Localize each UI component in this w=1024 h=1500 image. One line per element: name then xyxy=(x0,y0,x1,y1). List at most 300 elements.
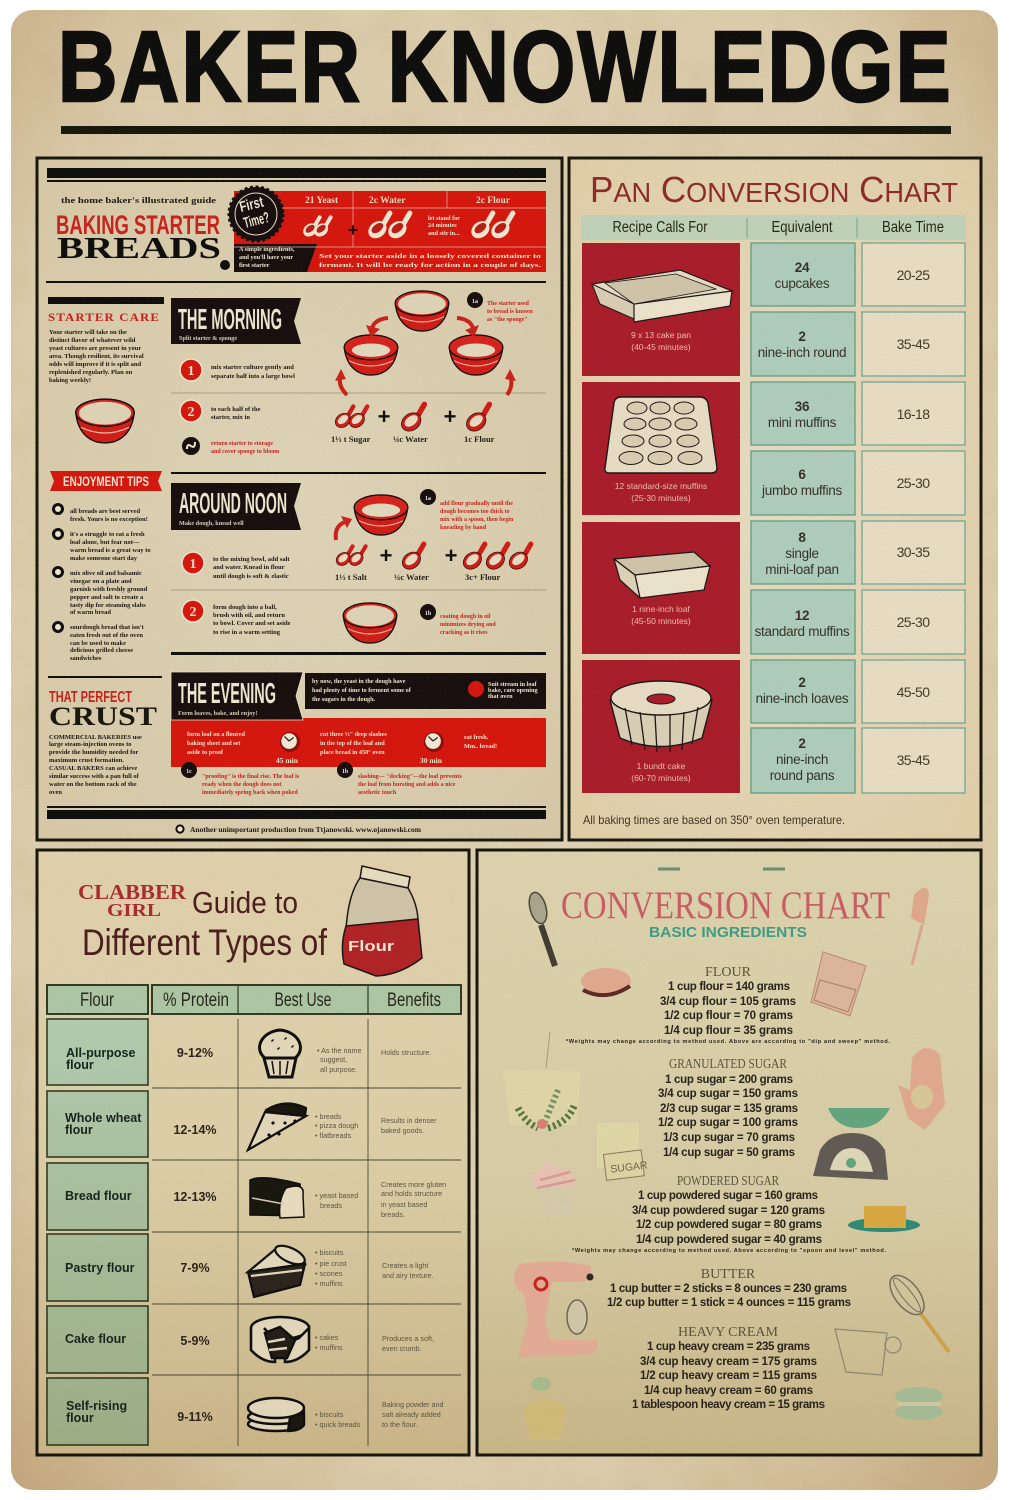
sidebar: starter care: baking weekly! xyxy=(49,377,91,384)
bake time cells: 25-30 xyxy=(897,614,930,630)
heavy cream conversions xyxy=(632,1325,825,1411)
sidebar: that perfect crust: provide the humidity needed for xyxy=(49,749,139,756)
best use lists: suggest, xyxy=(320,1055,347,1064)
icon: wire whisk xyxy=(883,1269,949,1352)
best use lists: • muffins xyxy=(315,1279,343,1288)
equivalent cells: cupcakes xyxy=(775,276,830,291)
equivalent cells: 2 xyxy=(798,329,806,344)
noon bowl and ingredients: + xyxy=(380,543,392,568)
noon notes: dough becomes too thick to xyxy=(440,509,510,515)
pan: nine-inch loaf xyxy=(582,522,740,654)
heavy cream conversions: 3/4 cup heavy cream = 175 grams xyxy=(640,1356,817,1368)
icon: pizza slice xyxy=(248,1103,306,1150)
equivalent cells: 12 xyxy=(795,608,809,623)
banner: the morning xyxy=(171,298,301,344)
banner: the morning: Split starter & sponge xyxy=(179,335,237,342)
noon steps: 1 xyxy=(190,557,196,572)
evening black band: had plenty of time to ferment some of xyxy=(312,687,412,694)
granulated sugar conversions xyxy=(658,1057,798,1159)
morning ingredients: 1⅓ t Sugar xyxy=(331,434,371,444)
powdered sugar conversions: *Weights may change according to method used. Above according to "spoon and level" method. xyxy=(572,1248,886,1254)
benefits text: Creates more gluten xyxy=(381,1180,446,1189)
evening notes: ready when the dough does not xyxy=(202,782,281,788)
benefits text: baked goods. xyxy=(381,1126,424,1135)
equivalent cells: 36 xyxy=(795,399,810,414)
heading: clabber girl guide xyxy=(78,880,328,963)
flour conversions: 1/2 cup flour = 70 grams xyxy=(664,1010,793,1022)
equivalent cells: mini-loaf pan xyxy=(765,562,839,577)
flour name cells: Cake flour xyxy=(65,1332,126,1346)
sidebar: starter care: Your starter will take on the xyxy=(49,329,127,336)
sidebar: enjoyment tips: warm bread is a great way to xyxy=(70,547,151,554)
equivalent cells: nine-inch round xyxy=(758,345,846,360)
panel: baking starter breads xyxy=(37,158,562,840)
protein percentages: 7-9% xyxy=(180,1261,210,1275)
table header: Recipe Calls For xyxy=(612,219,708,236)
first starter recipe banner xyxy=(234,191,546,272)
table header: Equivalent xyxy=(772,219,833,236)
sidebar: that perfect crust: COMMERCIAL BAKERIES use xyxy=(49,734,142,741)
table header: flour: Benefits xyxy=(387,990,441,1011)
note: sponge xyxy=(467,292,533,323)
icon: layer cake xyxy=(251,1317,309,1362)
icon: pie slice xyxy=(248,1242,307,1297)
equivalent cells: standard muffins xyxy=(755,624,850,639)
evening instructions band: 45 min xyxy=(276,756,299,765)
banner: the morning: THE MORNING xyxy=(178,304,282,336)
noon steps xyxy=(182,552,291,636)
sidebar: that perfect crust: maximum crust formation. xyxy=(49,757,124,764)
heading: pan conversion chart: PAN CONVERSION CHART xyxy=(590,169,958,210)
granulated sugar conversions: 2/3 cup sugar = 135 grams xyxy=(660,1103,798,1115)
equivalent cells: 24 xyxy=(795,260,810,275)
badge: first time: First xyxy=(238,194,265,216)
powdered sugar conversions: 3/4 cup powdered sugar = 120 grams xyxy=(632,1205,825,1217)
heading: clabber girl guide: Different Types of xyxy=(82,922,328,963)
heavy cream conversions: 1/2 cup heavy cream = 115 grams xyxy=(640,1370,817,1382)
first starter recipe banner: and you'll have your xyxy=(239,254,293,261)
equivalent cells: mini muffins xyxy=(768,415,837,430)
sidebar: enjoyment tips: of warm bread xyxy=(70,609,111,616)
section: the morning xyxy=(171,291,546,455)
evening instructions band: baking sheet and set xyxy=(187,740,241,747)
noon steps: brush with oil, and return xyxy=(213,612,285,619)
benefits text: Produces a soft, xyxy=(382,1334,434,1343)
butter conversions: BUTTER xyxy=(701,1267,756,1282)
sidebar: enjoyment tips xyxy=(50,471,162,662)
evening notes: slashing— "docking"—the loaf prevents xyxy=(358,774,462,780)
noon bowl and ingredients: 3c+ Flour xyxy=(465,572,501,582)
benefits text: Holds structure. xyxy=(381,1048,431,1057)
banner: the evening xyxy=(171,672,303,720)
pan: bundt cake: 1 bundt cake xyxy=(637,761,686,771)
bake time cells: 20-25 xyxy=(897,267,930,283)
best use lists: • flatbreads xyxy=(315,1131,351,1140)
evening instructions band: 30 min xyxy=(420,756,443,765)
heavy cream conversions: 1 cup heavy cream = 235 grams xyxy=(647,1341,810,1353)
icon: green macaron xyxy=(895,1387,943,1420)
best use lists: • pizza dough xyxy=(315,1121,358,1130)
first starter recipe banner: Set your starter aside in a loosely covered container to xyxy=(319,253,541,260)
heading: baking starter breads: the home baker's illustrated guide xyxy=(61,195,216,205)
noon steps: until dough is soft & elastic xyxy=(213,573,289,580)
bake time cells: 16-18 xyxy=(897,406,930,422)
icon: dark whisk xyxy=(526,890,555,966)
noon notes: kneading by hand xyxy=(440,525,487,531)
morning steps xyxy=(180,359,295,455)
butter conversions xyxy=(607,1267,851,1309)
first starter recipe banner: + xyxy=(348,220,358,240)
butter conversions: 1/2 cup butter = 1 stick = 4 ounces = 115 grams xyxy=(607,1297,851,1309)
first starter recipe banner: 24 minutes xyxy=(428,222,457,229)
flour name cells: All-purpose xyxy=(66,1046,135,1060)
evening instructions band: eat fresh. xyxy=(464,734,489,741)
icon: pink macaron xyxy=(581,968,631,995)
bake time cells: 30-35 xyxy=(897,544,930,560)
icon: kitchen scale xyxy=(813,1108,890,1180)
morning ingredients: 1c Flour xyxy=(464,434,495,444)
sidebar: that perfect crust: CASUAL BAKERS can achieve xyxy=(49,765,137,772)
noon steps: to the mixing bowl, add salt xyxy=(213,556,290,563)
first starter recipe banner: ferment. It will be ready for action in a couple of days. xyxy=(319,262,542,269)
first starter recipe banner: and stir in... xyxy=(428,230,460,237)
equivalent cells: jumbo muffins xyxy=(761,483,842,498)
table grid lines xyxy=(152,1019,461,1446)
noon notes: 1b xyxy=(425,611,432,617)
evening instructions band: Mm.. bread! xyxy=(464,743,497,750)
flour name cells: flour xyxy=(66,1411,94,1425)
benefits text: breads. xyxy=(381,1210,405,1219)
first starter recipe banner: let stand for xyxy=(428,215,460,222)
sidebar: enjoyment tips: vinegar on a plate and xyxy=(70,578,132,585)
table header: flour: Flour xyxy=(80,990,115,1011)
noon steps: to rise in a warm setting xyxy=(213,629,281,636)
banner: around noon: AROUND NOON xyxy=(179,488,287,520)
sidebar: starter care xyxy=(48,297,164,444)
morning steps: to each half of the xyxy=(211,406,261,413)
evening instructions band: aside to proof xyxy=(187,749,224,756)
evening instructions band: cut three ½" deep slashes xyxy=(320,731,387,738)
benefits text: Creates a light xyxy=(382,1261,428,1270)
powdered sugar conversions: 1/4 cup powdered sugar = 40 grams xyxy=(636,1234,822,1246)
icon: biscuit stack xyxy=(248,1398,304,1431)
icon: pink cupcake xyxy=(532,1162,578,1216)
heading: conversion chart: CONVERSION CHART xyxy=(561,884,890,927)
section: around noon xyxy=(171,483,546,644)
evening instructions band xyxy=(171,718,546,767)
best use lists: • cakes xyxy=(315,1333,339,1342)
evening black band: Suit stream in loaf xyxy=(488,681,537,688)
sidebar: enjoyment tips: can be used to make xyxy=(70,640,126,647)
evening notes: 1b xyxy=(342,769,349,775)
pan: bundt cake xyxy=(582,660,740,793)
noon notes: coating dough in oil xyxy=(440,614,491,620)
noon bowl and ingredients: ¼c Water xyxy=(394,572,429,582)
morning ingredients: ¼c Water xyxy=(393,434,428,444)
flour conversions: 3/4 cup flour = 105 grams xyxy=(660,996,796,1008)
sidebar: that perfect crust: CRUST xyxy=(49,702,157,731)
heading: conversion chart xyxy=(561,869,890,941)
note: sponge: The starter used xyxy=(487,301,530,307)
bake time cells: 25-30 xyxy=(897,475,930,491)
icon: flour bag: Flour xyxy=(348,938,394,955)
morning steps: 2 xyxy=(188,405,194,420)
sidebar: starter care: replenished regularly. Plan on xyxy=(49,369,133,376)
morning steps: separate half into a large bowl xyxy=(211,373,295,380)
benefits text: even crumb. xyxy=(382,1344,422,1353)
flour name cells: flour xyxy=(66,1058,94,1072)
heading: conversion chart: BASIC INGREDIENTS xyxy=(649,924,807,941)
noon steps: form dough into a ball, xyxy=(213,604,277,611)
icon: oven mitt xyxy=(898,1048,945,1130)
best use lists: all purpose. xyxy=(320,1065,357,1074)
footer credit: Another unimportant production from Ttjanowski. www.ojanowski.com xyxy=(190,826,421,834)
granulated sugar conversions: 1/3 cup sugar = 70 grams xyxy=(663,1132,795,1144)
morning steps: and cover sponge to bloom xyxy=(211,449,279,455)
noon bowl and ingredients: + xyxy=(445,543,457,568)
footnote: All baking times are based on 350° oven temperature. xyxy=(583,813,845,827)
bake time cells: 45-50 xyxy=(897,684,930,700)
protein percentages: 9-12% xyxy=(177,1046,213,1060)
granulated sugar conversions: 3/4 cup sugar = 150 grams xyxy=(658,1088,798,1100)
equivalent cells: 6 xyxy=(798,467,806,482)
banner: around noon: Make dough, knead well xyxy=(179,520,244,527)
sidebar: starter care: STARTER CARE xyxy=(48,310,160,324)
table header: flour: Best Use xyxy=(274,990,332,1011)
note: sponge: 1a xyxy=(472,299,478,305)
sidebar: enjoyment tips: garnish with freshly ground xyxy=(70,586,148,593)
flour name cells: Whole wheat xyxy=(65,1111,142,1125)
equivalent cells: 2 xyxy=(798,736,806,751)
sidebar: starter care: yeast cultures are present in your xyxy=(49,345,141,352)
best use lists: • As the name xyxy=(317,1046,361,1055)
noon notes: 1a xyxy=(425,496,431,502)
protein percentages: 12-14% xyxy=(173,1123,217,1137)
sidebar: that perfect crust xyxy=(48,676,162,796)
flour conversions: FLOUR xyxy=(705,965,752,980)
sidebar: enjoyment tips: eaten fresh out of the oven xyxy=(70,632,143,639)
equivalent cells: nine-inch xyxy=(776,752,828,767)
equivalent cells: 8 xyxy=(798,530,806,545)
noon steps: to bowl. Cover and set aside xyxy=(213,620,291,627)
sidebar: that perfect crust: oven xyxy=(49,789,62,796)
pan: 9 x 13 cake pan xyxy=(582,243,740,376)
noon notes: minimizes drying and xyxy=(440,622,496,628)
pan: muffin tin: (25-30 minutes) xyxy=(631,493,691,503)
evening black band xyxy=(305,673,546,709)
protein percentages: 9-11% xyxy=(177,1410,213,1424)
heading: clabber girl guide: Guide to xyxy=(192,885,298,920)
morning ingredients xyxy=(331,404,495,444)
icon: sugar card xyxy=(597,1123,649,1180)
best use lists: • scones xyxy=(315,1269,343,1278)
first starter recipe banner: A simple ingredients, xyxy=(239,246,295,253)
evening notes: immediately spring back when poked xyxy=(202,790,298,796)
heading: clabber girl guide: GIRL xyxy=(107,900,161,920)
noon notes: cracking as it rises xyxy=(440,630,488,636)
sidebar: enjoyment tips: it's a struggle to eat a fresh xyxy=(70,531,145,538)
first starter recipe banner: first starter xyxy=(239,262,270,269)
panel: pan conversion chart xyxy=(569,158,981,840)
heavy cream conversions: 1/4 cup heavy cream = 60 grams xyxy=(644,1385,813,1397)
best use lists: • quick breads xyxy=(315,1420,361,1429)
protein percentages: 5-9% xyxy=(180,1334,210,1348)
morning bowl cycle diagram xyxy=(335,291,516,395)
noon notes xyxy=(420,489,514,636)
best use lists: • muffins xyxy=(315,1343,343,1352)
benefits text: to the flour. xyxy=(382,1420,418,1429)
noon steps: 2 xyxy=(190,605,196,620)
benefits text: and airy texture. xyxy=(382,1271,434,1280)
table header: Bake Time xyxy=(882,219,944,236)
icon: jar with wreath xyxy=(503,1032,581,1129)
noon bowl and ingredients: 1⅓ t Salt xyxy=(335,572,367,582)
note: sponge: to bread is known xyxy=(487,309,533,315)
evening notes: the loaf from bursting and adds a nice xyxy=(358,782,456,788)
sidebar: starter care: odds will improve if it is split and xyxy=(49,361,142,368)
evening notes: "proofing" is the final rise. The loaf is xyxy=(202,774,300,780)
evening notes: 1c xyxy=(186,769,192,775)
sidebar: that perfect crust: water on the bottom rack of the xyxy=(49,781,137,788)
sidebar: enjoyment tips: sandwiches xyxy=(70,655,102,662)
morning steps: mix starter culture gently and xyxy=(211,364,294,371)
first starter recipe banner: 2c Water xyxy=(369,196,406,206)
panel: guide to flour xyxy=(37,850,469,1455)
equivalent cells: single xyxy=(785,546,819,561)
morning steps: return starter to storage xyxy=(211,441,273,447)
sidebar: enjoyment tips: ENJOYMENT TIPS xyxy=(63,473,149,489)
pan: 9 x 13 cake pan: (40-45 minutes) xyxy=(631,342,691,352)
table header: flour xyxy=(47,985,461,1014)
heading: baking starter breads: BREADS xyxy=(57,230,221,265)
best use lists: • biscuits xyxy=(315,1248,344,1257)
powdered sugar conversions: 1 cup powdered sugar = 160 grams xyxy=(638,1190,818,1202)
sidebar: enjoyment tips: all breads are best served xyxy=(70,508,141,515)
first starter recipe banner: 2c Flour xyxy=(476,196,511,206)
heavy cream conversions: HEAVY CREAM xyxy=(678,1325,779,1340)
table header xyxy=(581,215,966,240)
noon notes: mix with a spoon, then begin xyxy=(440,517,514,523)
evening black band: the sugars in the dough. xyxy=(312,696,376,703)
powdered sugar conversions: 1/2 cup powdered sugar = 80 grams xyxy=(636,1219,822,1231)
flour name cells xyxy=(47,1019,148,1445)
flour conversions xyxy=(566,965,890,1045)
best use lists: • breads xyxy=(315,1112,342,1121)
granulated sugar conversions: GRANULATED SUGAR xyxy=(669,1057,788,1072)
noon bowl and ingredients xyxy=(334,495,531,644)
noon steps: and water. Knead in flour xyxy=(213,564,285,571)
evening black band: bake, care opening xyxy=(488,687,538,694)
pan: 9 x 13 cake pan: 9 x 13 cake pan xyxy=(631,330,691,340)
sidebar: enjoyment tips: fresh. Yours is no exception! xyxy=(70,516,148,523)
flour conversions: 1/4 cup flour = 35 grams xyxy=(664,1025,793,1037)
powdered sugar conversions xyxy=(572,1174,886,1254)
icon: pink box xyxy=(811,952,866,1016)
flour name cells: flour xyxy=(65,1123,93,1137)
evening instructions band: in the top of the loaf and xyxy=(320,740,385,747)
protein percentages: 12-13% xyxy=(173,1190,217,1204)
bake time cells: 35-45 xyxy=(897,336,930,352)
icon: flour bag xyxy=(342,866,422,976)
bake time cells: 35-45 xyxy=(897,752,930,768)
section: the evening xyxy=(171,672,546,796)
evening notes xyxy=(181,762,462,796)
noon notes: add flour gradually until the xyxy=(440,501,513,507)
butter conversions: 1 cup butter = 2 sticks = 8 ounces = 230 grams xyxy=(610,1283,847,1295)
evening instructions band: place bread in 450° oven xyxy=(320,749,385,756)
equivalent cells: round pans xyxy=(770,768,835,783)
badge: first time xyxy=(229,187,283,241)
sidebar: enjoyment tips: tasty dip for steaming slabs xyxy=(70,602,146,609)
morning steps: 1 xyxy=(188,364,194,379)
best use lists: • pie crust xyxy=(315,1259,347,1268)
banner: the evening: Form loaves, bake, and enjoy! xyxy=(178,710,257,717)
sidebar: that perfect crust: THAT PERFECT xyxy=(49,689,132,706)
sidebar: that perfect crust: similar success with a pan full of xyxy=(49,773,140,780)
best use lists: • biscuits xyxy=(315,1410,344,1419)
benefits text: Baking powder and xyxy=(382,1400,444,1409)
sidebar: starter care: area. Though resilient, its survival xyxy=(49,353,144,360)
icon: butter dish xyxy=(848,1206,920,1232)
first starter recipe banner: 21 Yeast xyxy=(305,196,339,206)
morning ingredients: + xyxy=(444,404,456,429)
pan: muffin tin xyxy=(582,382,740,515)
powdered sugar conversions: POWDERED SUGAR xyxy=(677,1174,780,1189)
banner: the evening: THE EVENING xyxy=(178,678,276,710)
best use lists: breads xyxy=(320,1201,342,1210)
evening notes: aesthetic touch xyxy=(358,790,397,796)
flour name cells: Self-rising xyxy=(66,1399,127,1413)
icon: sprinkled cupcake xyxy=(523,1377,566,1440)
granulated sugar conversions: 1/2 cup sugar = 100 grams xyxy=(658,1117,798,1129)
granulated sugar conversions: 1 cup sugar = 200 grams xyxy=(665,1074,793,1086)
benefits text: salt already added xyxy=(382,1410,441,1419)
icon: stand mixer xyxy=(514,1261,598,1358)
sidebar: enjoyment tips: sourdough bread that isn't xyxy=(70,624,145,631)
heavy cream conversions: 1 tablespoon heavy cream = 15 grams xyxy=(632,1399,825,1411)
evening black band: that oven xyxy=(488,693,513,700)
flour name cells: Bread flour xyxy=(65,1189,132,1203)
flour conversions: 1 cup flour = 140 grams xyxy=(668,981,790,993)
pan: muffin tin: 12 standard-size muffins xyxy=(615,481,707,491)
flour conversions: *Weights may change according to method used. Above are according to "dip and sweep" method. xyxy=(566,1039,890,1045)
sidebar: that perfect crust: large steam-injection ovens to xyxy=(49,741,132,748)
panel: conversion chart xyxy=(477,850,981,1455)
flour name cells: Pastry flour xyxy=(65,1261,135,1275)
icon: muffin xyxy=(260,1030,300,1077)
benefits text: Results in denser xyxy=(381,1116,437,1125)
bake time cells xyxy=(862,243,965,793)
morning steps: starter, mix in xyxy=(211,414,250,421)
heading: baking starter breads: BAKING STARTER xyxy=(56,210,220,240)
morning ingredients: + xyxy=(378,404,390,429)
icon: measuring cup xyxy=(835,1329,901,1375)
badge: first time: Time? xyxy=(242,209,271,232)
icon: sugar card: SUGAR xyxy=(610,1159,649,1176)
benefits text: in yeast based xyxy=(381,1200,427,1209)
sidebar: enjoyment tips: delicious grilled cheese xyxy=(70,647,133,654)
best use lists: • yeast based xyxy=(315,1191,358,1200)
equivalent cells: 2 xyxy=(798,675,806,690)
equivalent cells xyxy=(751,243,855,793)
pan: nine-inch loaf: 1 nine-inch loaf xyxy=(632,604,690,614)
granulated sugar conversions: 1/4 cup sugar = 50 grams xyxy=(663,1147,795,1159)
equivalent cells: nine-inch loaves xyxy=(756,691,849,706)
sidebar: enjoyment tips: mix olive oil and balsamic xyxy=(70,570,142,577)
sidebar: enjoyment tips: loaf alone, but fear not— xyxy=(70,539,140,546)
note: sponge: as "the sponge" xyxy=(487,317,528,323)
pan: nine-inch loaf: (45-50 minutes) xyxy=(631,616,691,626)
